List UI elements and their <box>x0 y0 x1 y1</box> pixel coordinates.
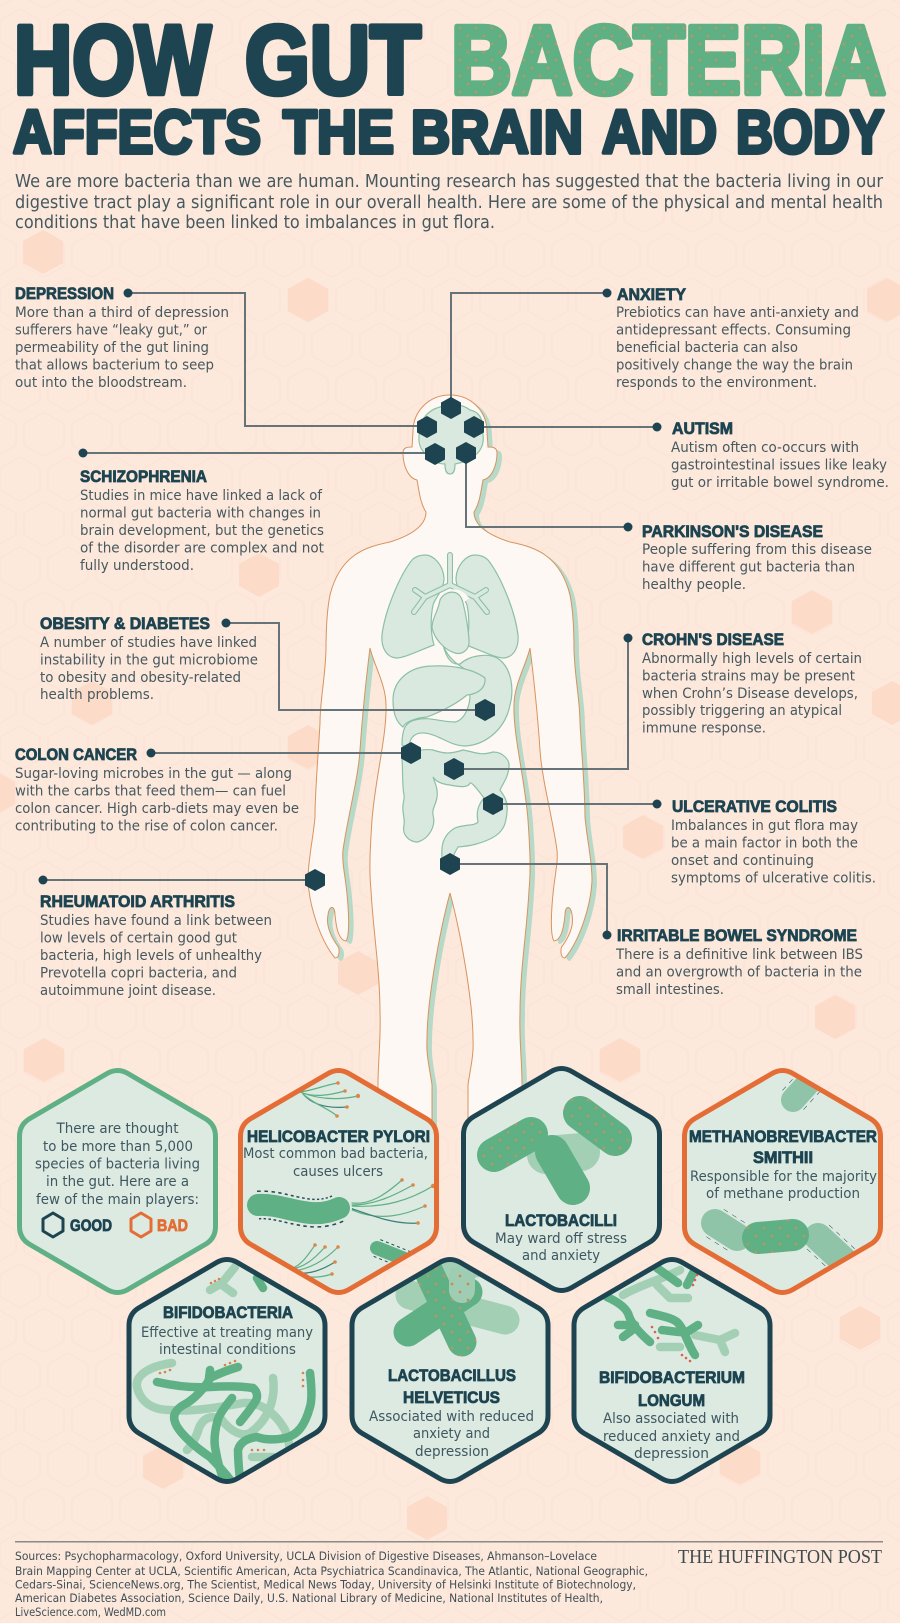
block: parkinson's disease: healthy people. <box>642 577 746 593</box>
block: rheumatoid arthritis: Prevotella copri bacteria, and <box>40 966 237 982</box>
legend intro text <box>35 1121 200 1208</box>
panel: lactobacillus helveticus: anxiety and <box>413 1426 490 1442</box>
panel: methanobrevibacter smithii: of methane production <box>706 1186 860 1202</box>
block: anxiety: antidepressant effects. Consuming <box>616 322 851 338</box>
panel: bifidobacterium longum <box>574 1260 770 1482</box>
block: schizophrenia: of the disorder are complex and not <box>80 540 324 556</box>
block: autism: gut or irritable bowel syndrome. <box>671 475 889 491</box>
block: colon cancer: COLON CANCER <box>15 745 137 764</box>
block: anxiety: ANXIETY <box>617 285 687 304</box>
title <box>13 6 886 167</box>
block: crohn's disease: when Crohn’s Disease develops, <box>642 686 858 702</box>
trachea <box>414 555 487 612</box>
panel: lactobacillus helveticus <box>352 1260 548 1482</box>
block: colon cancer: colon cancer. High carb-diets may even be <box>15 801 299 817</box>
block: rheumatoid arthritis: autoimmune joint disease. <box>40 983 216 999</box>
block: depression: sufferers have “leaky gut,” or <box>15 322 207 338</box>
block: rheumatoid arthritis: RHEUMATOID ARTHRITIS <box>40 892 235 911</box>
block: obesity and diabetes: to obesity and obesity-related <box>40 670 241 686</box>
block: autism <box>671 419 889 491</box>
legend intro text: There are thought <box>56 1121 179 1137</box>
panel: lactobacilli: and anxiety <box>522 1248 600 1264</box>
block: schizophrenia: brain development, but the genetics <box>80 523 324 539</box>
block: crohn's disease: immune response. <box>642 720 766 736</box>
intro text <box>15 172 884 233</box>
block: obesity and diabetes: health problems. <box>40 687 154 703</box>
liver <box>393 666 485 727</box>
block: obesity and diabetes: instability in the gut microbiome <box>40 652 258 668</box>
panel: helicobacter pylori: HELICOBACTER PYLORI <box>247 1127 430 1146</box>
panel: methanobrevibacter smithii: Responsible for the majority <box>690 1169 877 1185</box>
lungs <box>382 555 518 658</box>
panel: helicobacter pylori <box>240 1070 436 1292</box>
block: parkinson's disease: People suffering from this disease <box>642 542 872 558</box>
block: irritable bowel syndrome: and an overgrowth of bacteria in the <box>616 964 862 980</box>
colon <box>402 750 509 865</box>
block: schizophrenia: fully understood. <box>80 558 194 574</box>
sources footer: Brain Mapping Center at UCLA, Scientific American, Acta Psychiatrica Scandinavica, The Atlantic, National Geographic, <box>15 1564 648 1578</box>
panel: bifidobacterium longum: LONGUM <box>638 1391 705 1410</box>
block: depression: permeability of the gut lining <box>15 340 209 356</box>
body outline <box>308 395 592 1150</box>
bacteria illustration: helicobacter <box>258 1081 435 1277</box>
logo: the huffington post: THE HUFFINGTON POST <box>678 1546 882 1568</box>
panel: bifidobacterium longum: depression <box>634 1446 709 1462</box>
block: autism: gastrointestinal issues like leaky <box>671 458 887 474</box>
panel: methanobrevibacter smithii: SMITHII <box>753 1148 813 1167</box>
block: rheumatoid arthritis <box>40 892 272 999</box>
block: schizophrenia: SCHIZOPHRENIA <box>80 467 207 486</box>
panel: lactobacilli: LACTOBACILLI <box>505 1211 617 1230</box>
stomach <box>402 645 512 748</box>
panel: lactobacilli: May ward off stress <box>495 1231 627 1247</box>
block: depression: out into the bloodstream. <box>15 375 187 391</box>
title line 1 dark words: HOW <box>14 6 211 114</box>
panel: lactobacillus helveticus: depression <box>415 1444 489 1460</box>
block: crohn's disease: bacteria strains may be present <box>642 668 855 684</box>
panel: bifidobacteria: BIFIDOBACTERIA <box>163 1303 293 1322</box>
legend intro text: few of the main players: <box>36 1192 199 1208</box>
sources footer: American Diabetes Association, Science Daily, U.S. National Library of Medicine, National Institutes of Health, <box>15 1591 603 1605</box>
panel: bifidobacterium longum: Also associated with <box>603 1411 739 1427</box>
block: depression <box>15 284 229 391</box>
block: irritable bowel syndrome <box>615 926 863 998</box>
panel: lactobacillus helveticus: LACTOBACILLUS <box>388 1366 516 1385</box>
block: parkinson's disease <box>642 522 872 593</box>
bacteria illustration: lactobacilli <box>494 1113 615 1188</box>
block: crohn's disease: Abnormally high levels of certain <box>642 651 862 667</box>
legend intro text: to be more than 5,000 <box>43 1139 193 1155</box>
block: ulcerative colitis <box>671 797 876 886</box>
brain <box>419 404 483 474</box>
bacteria illustration: lactobacillus helveticus <box>408 1262 505 1342</box>
icon: good hexagon key: GOOD <box>70 1216 112 1235</box>
legend intro text: species of bacteria living <box>35 1156 200 1172</box>
block: colon cancer: with the carbs that feed them— can fuel <box>15 784 286 800</box>
bacteria illustration: bifidobacteria <box>137 1267 312 1482</box>
block: rheumatoid arthritis: low levels of certain good gut <box>40 930 237 946</box>
title line 1 dark words <box>14 6 421 114</box>
title line 2 <box>13 98 884 167</box>
block: anxiety: Prebiotics can have anti-anxiety and <box>616 305 859 321</box>
block: ulcerative colitis: be a main factor in both the <box>671 836 858 852</box>
sources footer: Cedars-Sinai, ScienceNews.org, The Scientist, Medical News Today, University of Helsinki Institute of Biotechnology, <box>15 1578 636 1592</box>
block: rheumatoid arthritis: bacteria, high levels of unhealthy <box>40 948 262 964</box>
panel: methanobrevibacter smithii <box>684 1070 880 1292</box>
panel: intro legend hexagon <box>20 1070 216 1292</box>
panel: lactobacilli <box>464 1068 660 1290</box>
marker hexagons and end dots <box>38 288 662 940</box>
legend intro text: in the gut. Here are a <box>46 1174 189 1190</box>
block: irritable bowel syndrome: IRRITABLE BOWEL SYNDROME <box>617 926 857 945</box>
sources footer: Sources: Psychopharmacology, Oxford University, UCLA Division of Digestive Diseases, Ahmanson–Lovelace <box>15 1549 597 1563</box>
block: parkinson's disease: have different gut bacteria than <box>642 560 855 576</box>
block: anxiety: positively change the way the brain <box>616 358 853 374</box>
panel: bifidobacteria: intestinal conditions <box>159 1342 296 1358</box>
block: anxiety <box>616 285 859 391</box>
block: depression: DEPRESSION <box>15 284 114 303</box>
block: colon cancer: contributing to the rise of colon cancer. <box>15 818 278 834</box>
block: schizophrenia: normal gut bacteria with changes in <box>80 506 321 522</box>
block: crohn's disease: possibly triggering an atypical <box>642 703 842 719</box>
block: irritable bowel syndrome: small intestines. <box>616 982 724 998</box>
block: autism: Autism often co-occurs with <box>671 440 859 456</box>
panel: bifidobacteria <box>129 1260 325 1482</box>
block: depression: that allows bacterium to seep <box>15 358 214 374</box>
block: depression: More than a third of depression <box>15 305 229 321</box>
block: crohn's disease <box>642 630 862 736</box>
body shadow <box>313 398 597 1153</box>
block: colon cancer: Sugar-loving microbes in the gut — along <box>15 766 292 782</box>
block: colon cancer <box>15 745 299 834</box>
panel: lactobacillus helveticus: Associated with reduced <box>369 1409 534 1425</box>
bacteria illustration: bifidobacterium longum <box>607 1268 735 1362</box>
block: schizophrenia <box>80 467 324 574</box>
block: obesity and diabetes: OBESITY & DIABETES <box>40 614 210 633</box>
block: rheumatoid arthritis: Studies have found a link between <box>40 913 272 929</box>
block: obesity and diabetes <box>40 614 258 703</box>
block: ulcerative colitis: onset and continuing <box>671 853 814 869</box>
block: obesity and diabetes: A number of studies have linked <box>40 635 257 651</box>
intro text: conditions that have been linked to imbalances in gut flora. <box>15 213 495 233</box>
block: autism: AUTISM <box>672 419 733 438</box>
sources footer: LiveScience.com, WedMD.com <box>15 1605 166 1619</box>
block: ulcerative colitis: symptoms of ulcerative colitis. <box>671 870 876 886</box>
title line 2: THE <box>283 98 394 167</box>
title line 2: BRAIN <box>411 98 583 167</box>
title line 1 dark words: GUT <box>245 6 421 114</box>
block: ulcerative colitis: Imbalances in gut flora may <box>671 818 858 834</box>
panel: helicobacter pylori: causes ulcers <box>293 1164 383 1180</box>
heart <box>432 592 469 653</box>
connector lines <box>43 293 657 935</box>
panel: bifidobacterium longum: reduced anxiety and <box>603 1429 740 1445</box>
block: anxiety: beneficial bacteria can also <box>616 340 798 356</box>
block: anxiety: responds to the environment. <box>616 375 817 391</box>
block: parkinson's disease: PARKINSON'S DISEASE <box>642 522 823 541</box>
human body figure <box>308 395 597 1153</box>
sources footer <box>15 1541 883 1619</box>
block: ulcerative colitis: ULCERATIVE COLITIS <box>672 797 837 816</box>
panel: bifidobacteria: Effective at treating many <box>141 1325 313 1341</box>
block: irritable bowel syndrome: There is a definitive link between IBS <box>615 947 863 963</box>
title line 2: AFFECTS <box>13 98 261 167</box>
bacteria illustration: methanobrevibacter <box>715 1078 845 1262</box>
icon: bad hexagon key <box>131 1213 188 1237</box>
block: crohn's disease: CROHN'S DISEASE <box>642 630 784 649</box>
panel: methanobrevibacter smithii: METHANOBREVIBACTER <box>689 1127 877 1146</box>
icon: bad hexagon key: BAD <box>157 1216 188 1235</box>
panel: helicobacter pylori: Most common bad bacteria, <box>243 1146 428 1162</box>
icon: good hexagon key <box>43 1213 112 1237</box>
title line 2: AND <box>602 98 717 167</box>
block: schizophrenia: Studies in mice have linked a lack of <box>80 488 323 504</box>
panel: bifidobacterium longum: BIFIDOBACTERIUM <box>599 1368 745 1387</box>
panel: lactobacillus helveticus: HELVETICUS <box>403 1388 500 1407</box>
